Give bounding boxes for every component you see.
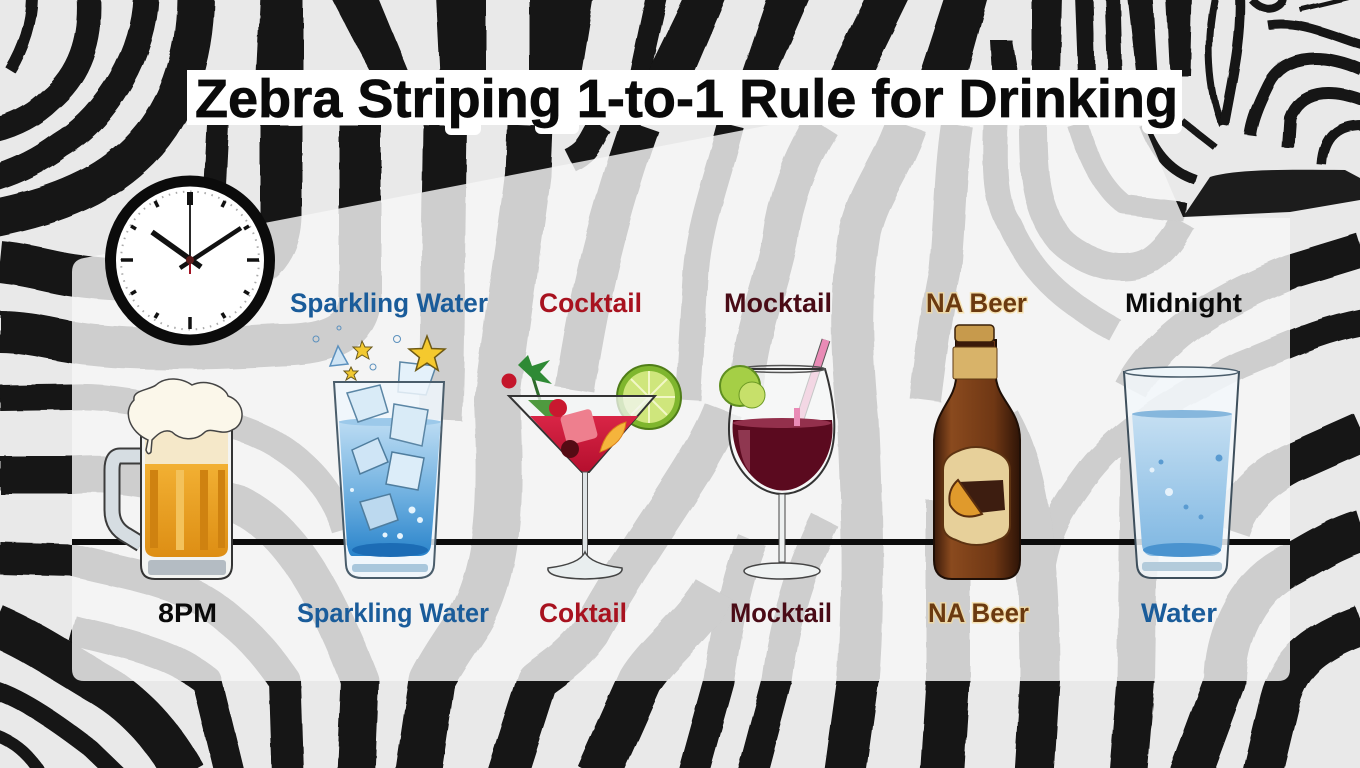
icon: beer mug [112, 379, 242, 579]
label: midnight: Midnight [1125, 288, 1242, 318]
label: NA beer top: NA Beer [926, 288, 1027, 318]
icon: sparkling water glass [313, 326, 445, 578]
translucent panel [72, 125, 1290, 681]
label: sparkling water bottom: Sparkling Water [297, 598, 489, 628]
label: water bottom: Water [1141, 598, 1218, 628]
label: 8PM: 8PM [158, 598, 217, 628]
icon: NA beer bottle [934, 325, 1020, 579]
label: sparkling water top: Sparkling Water [290, 288, 488, 318]
icon: water glass [1124, 367, 1239, 578]
label: mocktail bottom: Mocktail [730, 598, 832, 628]
zebra neck dark patch [1183, 170, 1360, 217]
title: Zebra Striping 1-to-1 Rule for Drinking [195, 69, 1178, 129]
label: coktail bottom: Coktail [539, 598, 627, 628]
icon: mocktail wine glass [720, 340, 834, 579]
label: NA beer bottom: NA Beer [928, 598, 1029, 628]
icon: wall clock [110, 181, 270, 340]
timeline line [72, 539, 1290, 545]
label: mocktail top: Mocktail [724, 288, 832, 318]
label: cocktail top: Cocktail [539, 288, 642, 318]
icon: cocktail glass [502, 355, 681, 579]
